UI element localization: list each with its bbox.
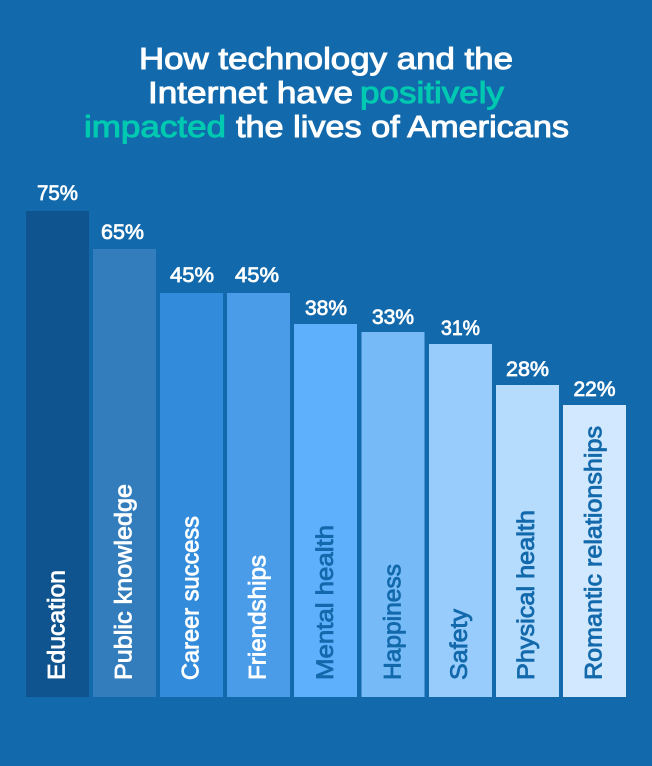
bar: Friendships 45%: Friendships [244, 555, 272, 680]
bar: Education 75%: Education [44, 570, 70, 680]
bar: Safety 31%: 31% [441, 317, 480, 340]
bar: Career success 45%: 45% [170, 264, 214, 287]
bar: Mental health 38%: 38% [305, 297, 347, 320]
bar: Public knowledge 65%: 65% [101, 221, 144, 244]
bar: Safety 31%: Safety [446, 609, 473, 680]
bar: Mental health 38% [294, 297, 357, 697]
bar: Education 75%: 75% [37, 182, 78, 205]
bar: Public knowledge 65%: Public knowledge [110, 484, 138, 680]
bar: Physical health 28% [496, 358, 559, 697]
bar: Safety 31% [429, 317, 492, 697]
bar: Friendships 45%: 45% [235, 264, 279, 287]
title [84, 41, 569, 144]
title: the lives of Americans [236, 109, 569, 144]
bar: Mental health 38%: Mental health [312, 525, 339, 680]
bar: Romantic relationships 22%: Romantic relationships [580, 426, 608, 680]
bar: Romantic relationships 22% [563, 378, 626, 697]
bar: Romantic relationships 22%: 22% [574, 378, 616, 401]
bar: Physical health 28%: 28% [506, 358, 549, 381]
title: How technology and the [139, 41, 513, 76]
bar: Happiness 33% [362, 306, 424, 697]
bar: Happiness 33%: Happiness [380, 564, 406, 680]
title: Internet have [148, 75, 353, 110]
title: positively [360, 75, 505, 110]
bar: Happiness 33%: 33% [372, 306, 414, 329]
bar: Public knowledge 65% [93, 221, 156, 697]
title: impacted [84, 109, 226, 144]
bar: Physical health 28%: Physical health [513, 510, 540, 680]
bar chart [26, 182, 626, 697]
bar: Friendships 45% [227, 264, 290, 697]
bar: Career success 45% [160, 264, 223, 697]
bar: Career success 45%: Career success [178, 516, 204, 680]
bar: Education 75% [26, 182, 89, 697]
